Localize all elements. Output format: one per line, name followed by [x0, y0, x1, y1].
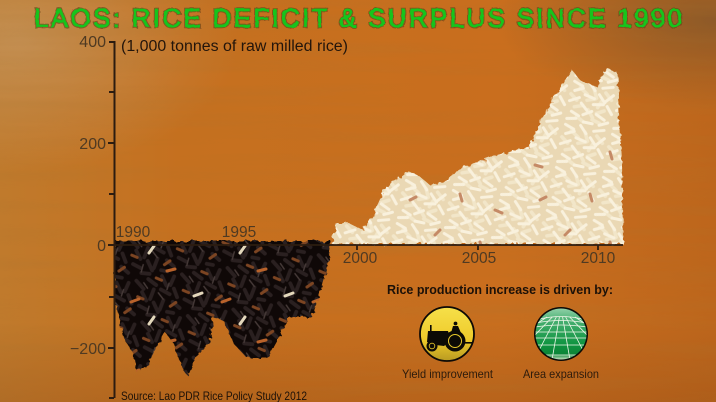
chart: rice surplus and deficit	[70, 34, 630, 398]
x axis labels: 1990	[116, 224, 151, 241]
x axis labels: 1995	[222, 224, 256, 241]
x axis labels: 2005	[462, 250, 496, 267]
icon: grid field, area expansion	[534, 307, 588, 361]
x axis labels: 2000	[343, 250, 378, 267]
title: LAOS: RICE DEFICIT & SURPLUS SINCE 1990	[34, 3, 682, 33]
driver heading: Rice production increase is driven by:	[387, 282, 613, 297]
y axis labels: −200	[70, 341, 106, 358]
icon label: area: Area expansion	[523, 367, 599, 381]
x axis labels	[116, 224, 616, 267]
y axis labels: 0	[97, 238, 106, 255]
x axis labels: 2010	[581, 250, 616, 267]
unit note: (1,000 tonnes of raw milled rice)	[121, 38, 348, 55]
x axis	[114, 245, 623, 250]
title: LAOS: RICE DEFICIT & SURPLUS SINCE 1990	[34, 3, 682, 33]
black rice area: deficit 1990-1998	[110, 235, 335, 380]
icon label: yield: Yield improvement	[402, 367, 494, 381]
y axis	[108, 41, 114, 398]
y axis labels: 400	[79, 34, 106, 51]
y axis labels: 200	[79, 136, 106, 153]
icon: tractor, yield improvement	[420, 307, 474, 361]
white rice area: surplus 1999-2011	[332, 68, 624, 246]
y axis labels	[70, 34, 106, 358]
